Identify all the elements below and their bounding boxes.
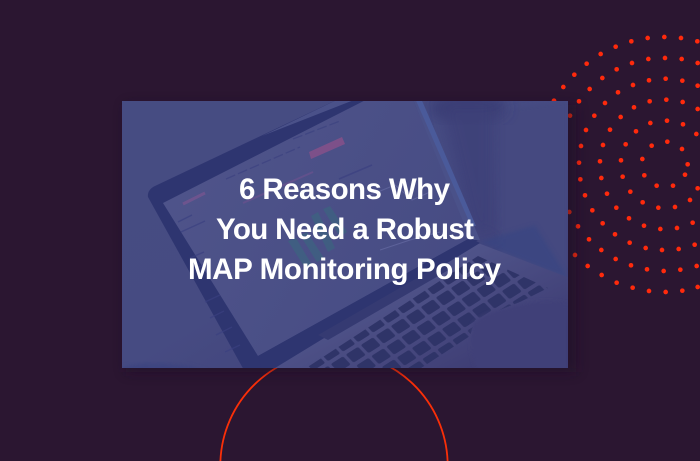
blurred object top right	[495, 101, 568, 290]
menu text strips	[226, 121, 340, 179]
lighter upper bezel	[264, 101, 480, 240]
bar chart	[288, 206, 347, 268]
keyboard deck	[276, 244, 538, 368]
desk background	[122, 101, 568, 368]
title line 1: 6 Reasons Why	[239, 173, 451, 206]
title line 2: You Need a Robust	[216, 213, 474, 246]
small chart heading	[339, 165, 372, 179]
photo panel: laptop on desk with blue overlay	[122, 80, 572, 372]
keyboard keys	[300, 256, 548, 372]
dashboard header pink button	[309, 137, 345, 159]
book at bottom left	[132, 366, 170, 368]
dark blurred shadow at top	[434, 101, 501, 114]
decorative red dot spiral	[552, 35, 700, 294]
screen contents	[178, 121, 440, 352]
speaker strip	[324, 266, 448, 340]
blue shadow wedge beside screen	[492, 228, 561, 272]
pink heading	[243, 172, 313, 203]
decorative red circle outline	[220, 352, 448, 461]
logo text strip	[183, 193, 205, 204]
hinge strip	[258, 238, 480, 372]
line chart	[368, 185, 440, 250]
screen	[163, 80, 470, 356]
hand	[471, 302, 568, 372]
blue edge of lid	[414, 96, 476, 226]
laptop lid and dark bezel	[148, 96, 478, 372]
sidebar text	[178, 215, 240, 352]
panel drop shadow	[258, 98, 584, 380]
title	[188, 173, 502, 286]
title line 3: MAP Monitoring Policy	[188, 253, 502, 286]
